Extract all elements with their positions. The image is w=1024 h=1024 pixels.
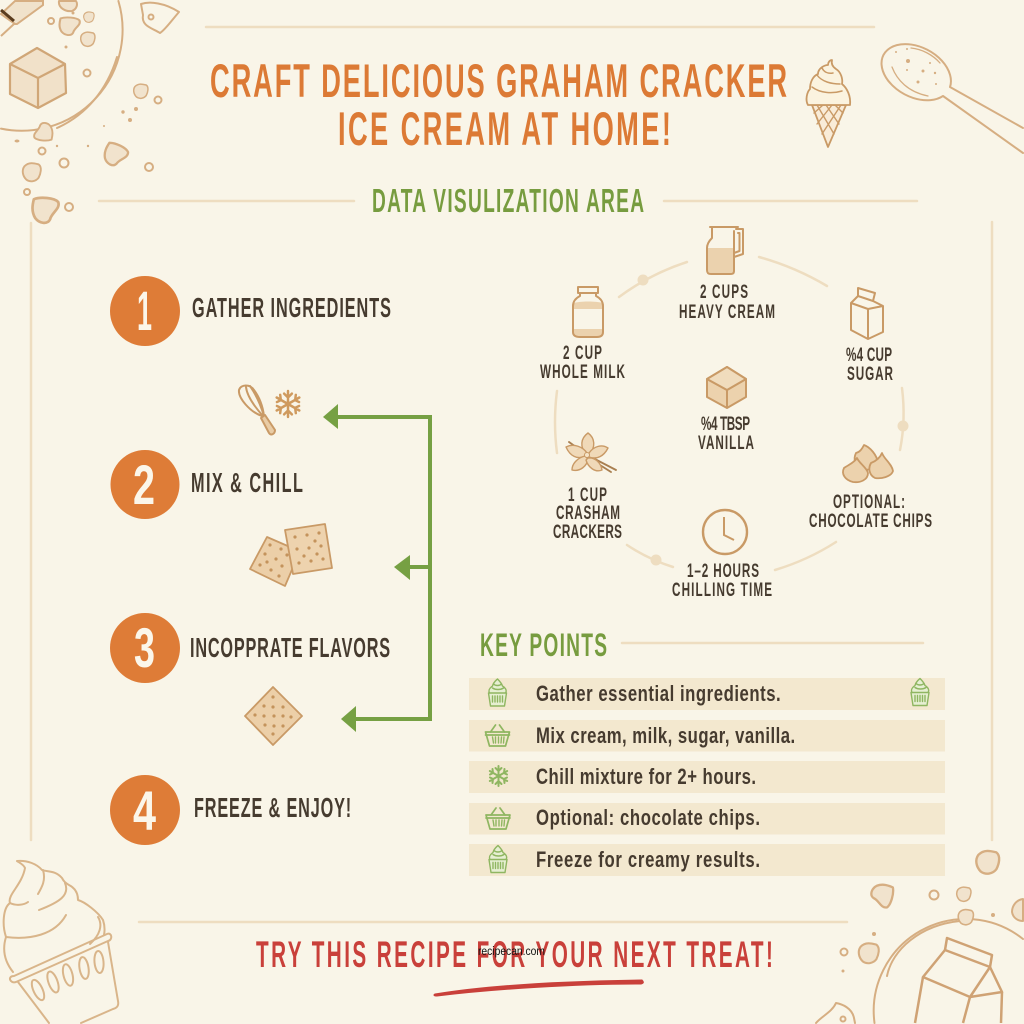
key point 2: Mix cream, milk, sugar, vanilla. — [536, 724, 795, 749]
icon: two graham crackers — [250, 524, 332, 586]
key point 3: Chill mixture for 2+ hours. — [536, 765, 756, 790]
key point 5: Freeze for creamy results. — [536, 848, 760, 873]
step 2 — [110, 450, 303, 519]
ingredient: chilling time: CHILLING TIME — [672, 579, 772, 601]
step 4: FREEZE & ENJOY! — [194, 791, 351, 823]
watermark: recipecan.com — [478, 946, 545, 958]
ingredient: graham crackers with vanilla flower: CRACKERS — [553, 521, 622, 543]
ingredient: graham crackers with vanilla flower — [553, 433, 622, 543]
step 4: 4 — [133, 779, 156, 842]
icon: ice cream cone — [807, 60, 850, 147]
icon: whisk and snowflake — [239, 386, 299, 434]
key points heading: KEY POINTS — [480, 627, 607, 663]
step 2: MIX & CHILL — [191, 466, 303, 498]
icon: diamond cracker — [245, 687, 302, 745]
section heading: data visualization area: DATA VISULIZATION AREA — [372, 183, 644, 219]
ingredient: optional chocolate chips — [809, 445, 932, 532]
title: CRAFT DELICIOUS GRAHAM CRACKER — [210, 55, 787, 108]
ingredient: sugar: SUGAR — [847, 363, 893, 385]
ingredient: chilling time: 1–2 HOURS — [687, 560, 759, 582]
ingredient: heavy cream: HEAVY CREAM — [679, 301, 775, 323]
ingredient: whole milk — [540, 287, 625, 383]
ingredient: optional chocolate chips: CHOCOLATE CHIPS — [809, 510, 932, 532]
ingredient: vanilla — [698, 367, 754, 454]
step 1 — [110, 276, 391, 346]
key point 4: Optional: chocolate chips. — [536, 806, 760, 831]
arrow bracket — [323, 404, 430, 732]
ingredient ring arcs — [555, 257, 908, 570]
bottom-right decoration: plate, milk carton and crumbs — [816, 851, 1023, 1023]
ingredient: chilling time — [672, 510, 772, 601]
title — [210, 55, 787, 156]
ingredient: whole milk: WHOLE MILK — [540, 361, 625, 383]
frame lines — [31, 27, 992, 840]
ingredient: sugar: %4 CUP — [846, 344, 892, 366]
step 4 — [110, 775, 351, 845]
ingredient: graham crackers with vanilla flower: CRASHAM — [556, 502, 620, 524]
step 1: GATHER INGREDIENTS — [192, 291, 391, 323]
icon: spoon — [882, 44, 1023, 153]
key point 1 — [469, 678, 945, 710]
call to action — [139, 922, 847, 996]
ingredient: vanilla: %4 TBSP — [701, 413, 750, 435]
title: ICE CREAM AT HOME! — [338, 103, 671, 156]
step 2: 2 — [133, 453, 155, 516]
key point 3 — [469, 761, 945, 793]
key points list — [469, 678, 945, 876]
top-left decoration: plate, cubes and crumbs — [1, 1, 179, 223]
key point 2 — [469, 720, 945, 752]
ingredient: vanilla: VANILLA — [698, 432, 754, 454]
step 1: 1 — [137, 279, 152, 342]
ingredient: heavy cream: 2 CUPS — [700, 281, 748, 303]
ingredient: whole milk: 2 CUP — [563, 342, 602, 364]
ingredient: optional chocolate chips: OPTIONAL: — [833, 491, 905, 513]
key point 4 — [469, 803, 945, 834]
step 3: INCOPPRATE FLAVORS — [190, 631, 390, 663]
ingredient: sugar — [846, 288, 893, 385]
step 3: 3 — [134, 616, 155, 679]
icon: cupcake bottom-left — [4, 861, 118, 1023]
key point 1: Gather essential ingredients. — [536, 682, 781, 707]
call to action: TRY THIS RECIPE FOR YOUR NEXT TREAT! — [256, 935, 773, 976]
ingredient: heavy cream — [679, 227, 775, 323]
ingredient: graham crackers with vanilla flower: 1 CUP — [568, 484, 607, 506]
key point 5 — [469, 844, 945, 876]
step 3 — [110, 613, 390, 683]
